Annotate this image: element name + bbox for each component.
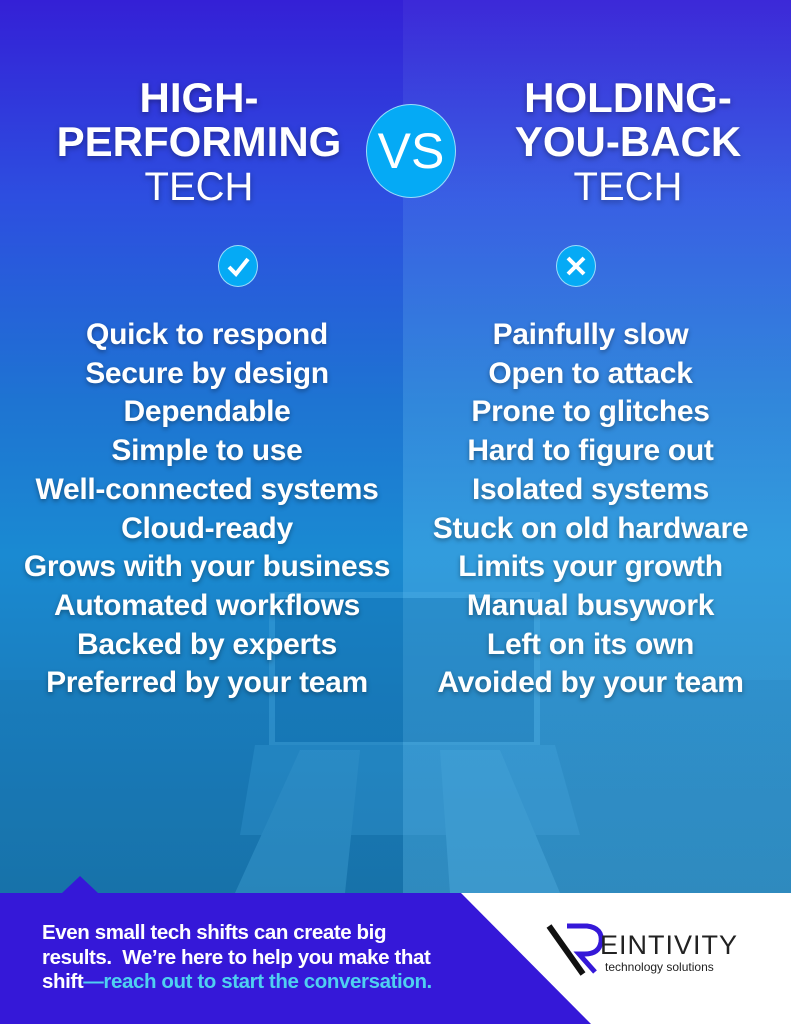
list: high-performing (22, 318, 392, 702)
footer text (42, 921, 432, 993)
right heading: HOLDING- (524, 74, 732, 121)
list: holding-you-back: Stuck on old hardware (433, 512, 748, 545)
list: high-performing: Grows with your business (24, 550, 390, 583)
laptop illustration (235, 592, 560, 893)
list: high-performing: Preferred by your team (46, 666, 368, 699)
list: high-performing: Automated workflows (54, 589, 360, 622)
left heading: TECH (145, 165, 253, 209)
list: high-performing: Well-connected systems (36, 473, 378, 506)
list: high-performing: Dependable (123, 395, 291, 428)
VS badge (366, 104, 456, 198)
footer text: Even small tech shifts can create big (42, 921, 386, 944)
list: high-performing: Backed by experts (77, 628, 337, 661)
logo: technology solutions (605, 960, 714, 974)
right heading: YOU-BACK (515, 118, 741, 165)
list: high-performing: Secure by design (85, 357, 329, 390)
list: holding-you-back: Left on its own (487, 628, 694, 661)
list: high-performing: Simple to use (111, 434, 303, 467)
list: holding-you-back: Avoided by your team (437, 666, 744, 699)
footer text: shift—reach out to start the conversation. (42, 970, 432, 993)
VS badge: VS (378, 123, 444, 179)
left heading (56, 74, 342, 209)
left heading: PERFORMING (57, 118, 341, 165)
list: holding-you-back (432, 318, 750, 702)
icon: check (218, 245, 258, 287)
right heading: TECH (574, 165, 682, 209)
list: holding-you-back: Manual busywork (467, 589, 714, 622)
list: holding-you-back: Hard to figure out (467, 434, 714, 467)
logo: EINTIVITY (600, 930, 738, 960)
right panel tint (403, 0, 791, 893)
list: high-performing: Quick to respond (86, 318, 328, 351)
icon: cross (556, 245, 596, 287)
left heading: HIGH- (140, 74, 258, 121)
list: high-performing: Cloud-ready (121, 512, 293, 545)
list: holding-you-back: Painfully slow (493, 318, 688, 351)
list: holding-you-back: Prone to glitches (471, 395, 710, 428)
list: holding-you-back: Limits your growth (458, 550, 723, 583)
right heading (514, 74, 742, 209)
list: holding-you-back: Open to attack (488, 357, 693, 390)
list: holding-you-back: Isolated systems (472, 473, 709, 506)
footer text: results. We’re here to help you make that (42, 946, 430, 968)
footer (0, 876, 791, 1024)
logo (546, 924, 738, 976)
